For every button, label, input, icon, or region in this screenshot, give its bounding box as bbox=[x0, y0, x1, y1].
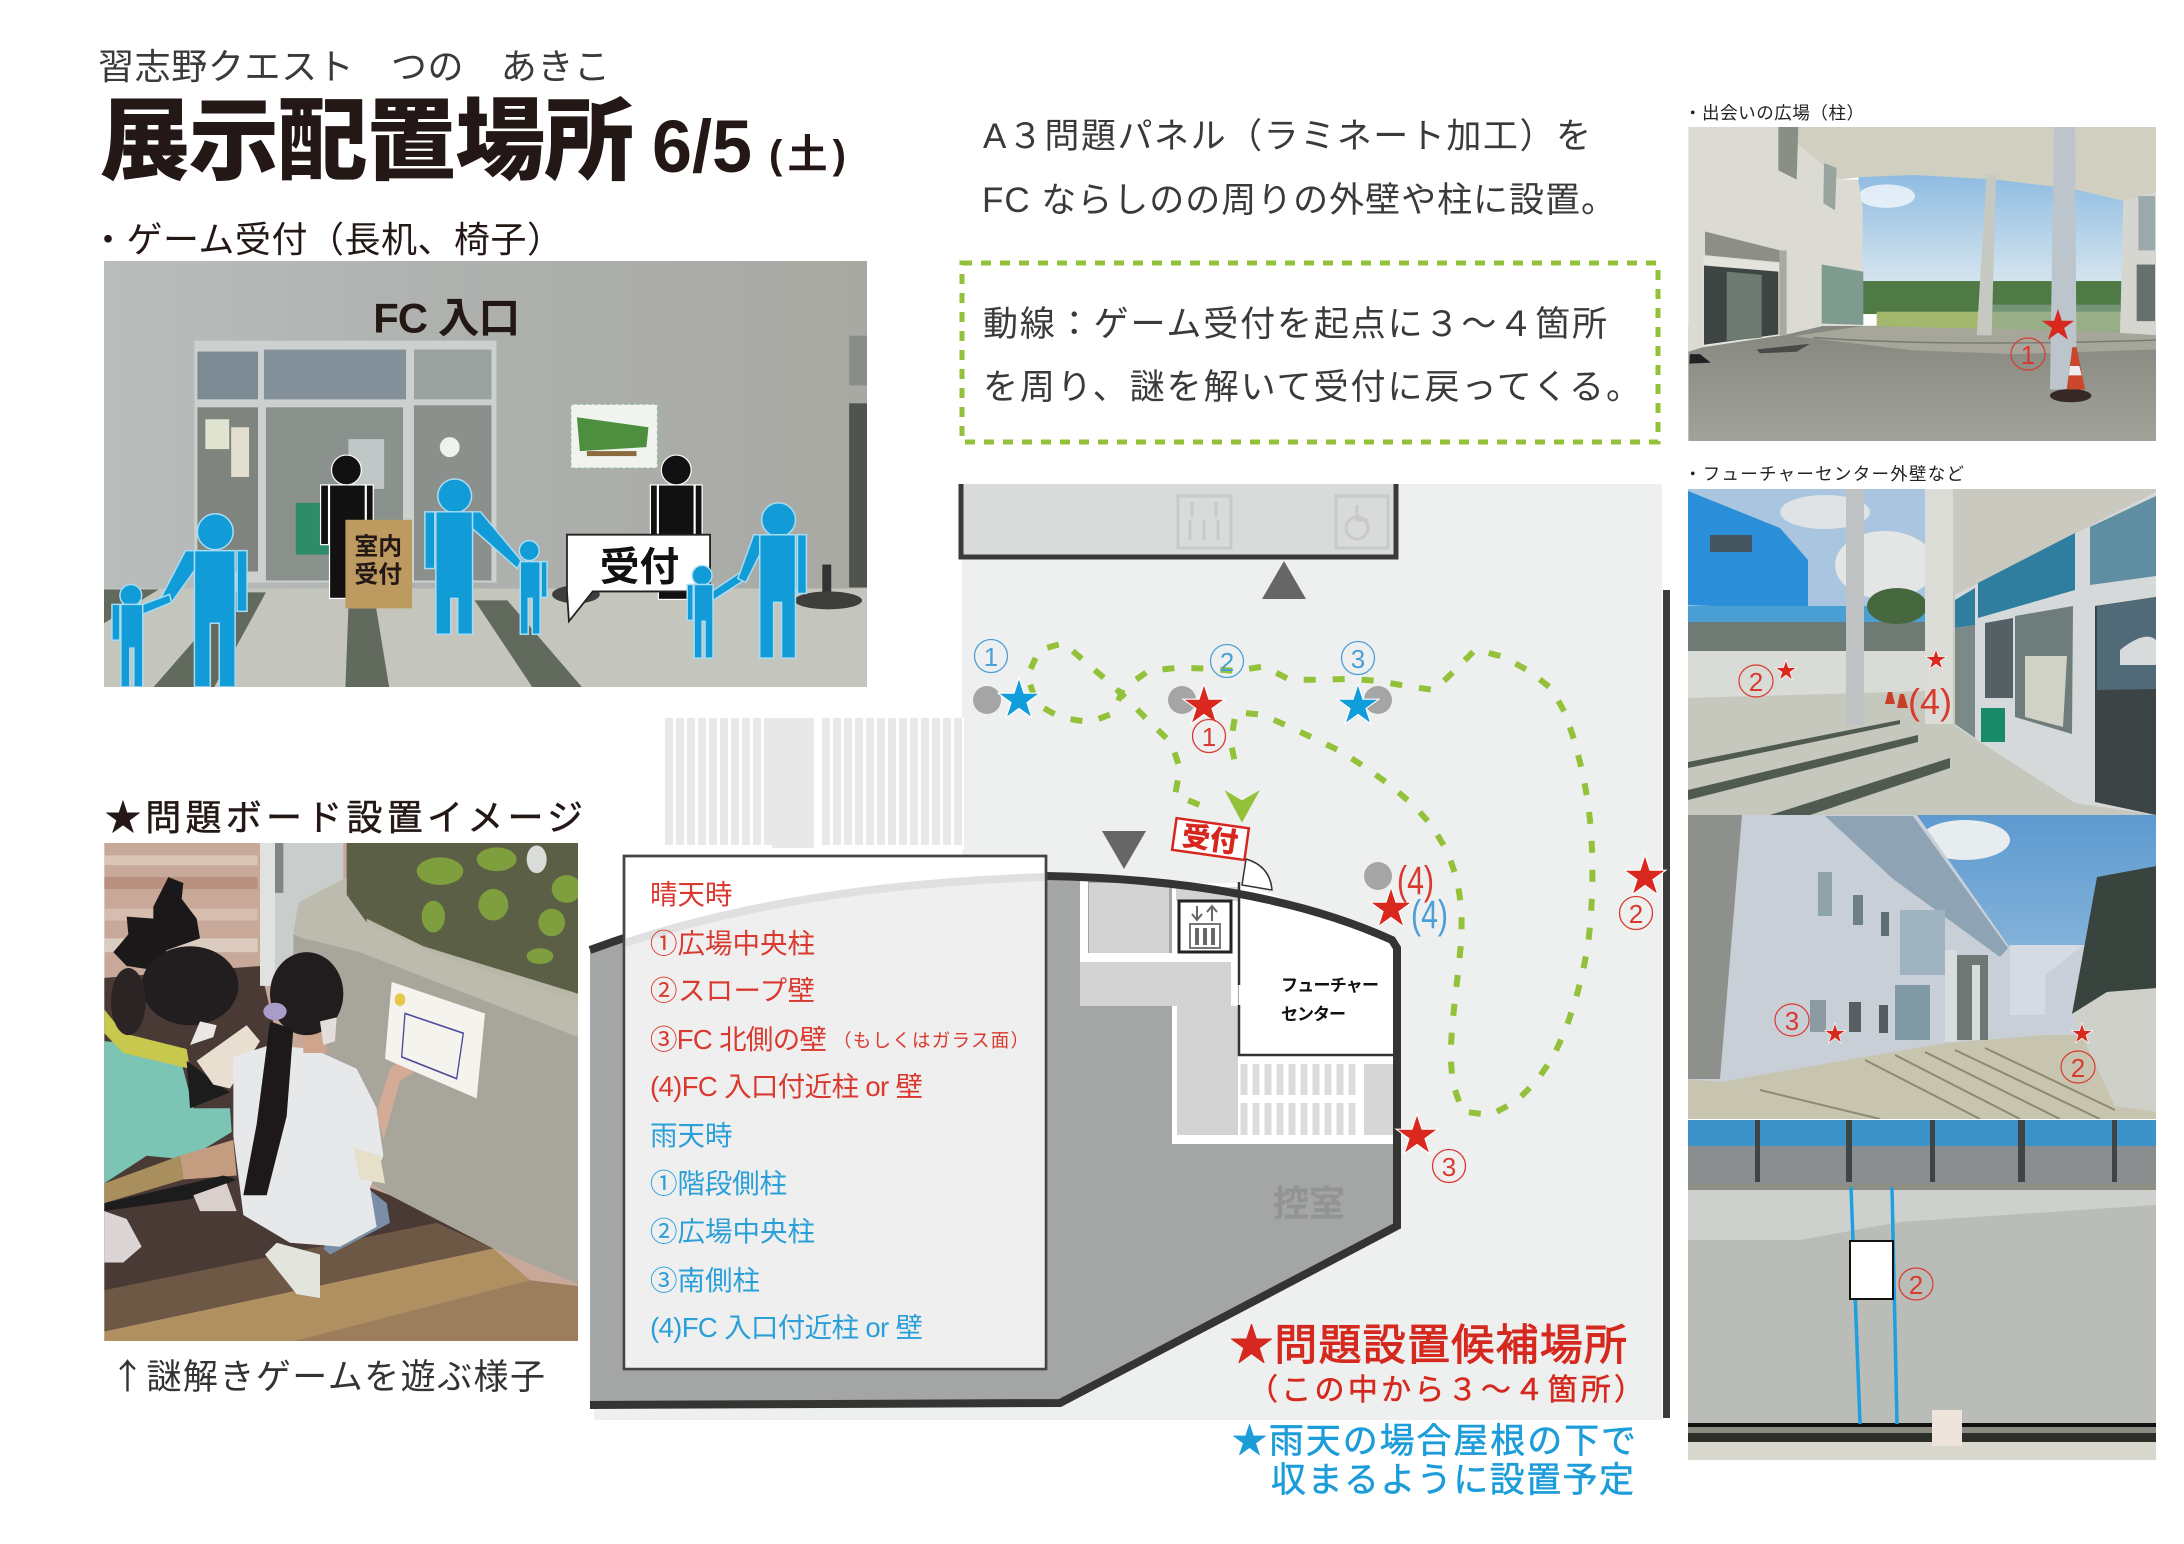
staff figure left bbox=[321, 455, 373, 598]
red stars bbox=[1776, 649, 1946, 680]
sample board bbox=[1932, 1410, 1962, 1446]
caption: meeting plaza pillar: ・出会いの広場（柱） bbox=[1684, 103, 1864, 123]
map: Future Center room: センター bbox=[1281, 1005, 1346, 1024]
green sign bbox=[1981, 708, 2005, 742]
legend: rainy day list: ②広場中央柱 bbox=[650, 1216, 815, 1247]
title: 展示配置場所 bbox=[100, 92, 634, 192]
map: red position numbers: 1 bbox=[1202, 722, 1216, 752]
legend: rainy day list: 雨天時 bbox=[650, 1120, 732, 1151]
text: A3 panel placement bbox=[982, 117, 1616, 220]
map: stairs bbox=[664, 718, 964, 850]
legend: sunny day list: (4)FC 入口付近柱 or 壁 bbox=[650, 1071, 923, 1102]
speech bubble: reception bbox=[567, 535, 710, 621]
photo panel: Future Center exterior bbox=[1688, 489, 2156, 815]
map: blue position numbers: (4) bbox=[1411, 893, 1448, 937]
staff figure right bbox=[650, 455, 702, 599]
note: candidate locations: ★問題設置候補場所 bbox=[1230, 1322, 1627, 1370]
position labels: 2 bbox=[1749, 667, 1763, 697]
map: pillars bbox=[973, 686, 1392, 890]
subtitle: team and author: 習志野クエスト つの あきこ bbox=[98, 46, 610, 87]
legend: sunny day list: ②スロープ壁 bbox=[650, 975, 815, 1006]
legend: sunny day list bbox=[650, 879, 1029, 1102]
legend: rainy day list: ③南側柱 bbox=[650, 1265, 760, 1296]
photo panel: children playing bbox=[104, 840, 582, 1345]
map: red position numbers: 2 bbox=[1629, 899, 1643, 929]
map: blue position numbers: 2 bbox=[1220, 647, 1234, 677]
legend: rainy day list bbox=[650, 1120, 923, 1343]
title date: (土) bbox=[769, 133, 846, 177]
position label bbox=[1899, 1268, 1933, 1300]
photo panel: south side of building bbox=[1688, 815, 2157, 1119]
sign: indoor reception bbox=[345, 520, 412, 608]
title date bbox=[652, 105, 846, 188]
map: blue position numbers: 1 bbox=[984, 642, 998, 672]
child in teal jacket bbox=[104, 946, 260, 1262]
map: blue stars bbox=[998, 678, 1379, 724]
legend: sunny day list: ①広場中央柱 bbox=[650, 928, 815, 959]
legend: rainy day list: ①階段側柱 bbox=[650, 1168, 787, 1199]
note: rainy day placement bbox=[1232, 1422, 1636, 1500]
legend: sunny day list: ③FC 北側の壁 bbox=[650, 1024, 827, 1055]
heading: board image: ★問題ボード設置イメージ bbox=[105, 797, 583, 838]
map: main building bbox=[590, 876, 1397, 1405]
photo panel: meeting plaza bbox=[1688, 127, 2158, 444]
blue tape lines bbox=[1851, 1187, 1897, 1424]
note: candidate locations: （この中から３～４箇所） bbox=[1248, 1374, 1644, 1407]
position 1: 1 bbox=[2021, 340, 2035, 370]
note: rainy day placement: ★雨天の場合屋根の下で bbox=[1232, 1422, 1636, 1461]
legend: sunny day list: （もしくはガラス面） bbox=[833, 1030, 1029, 1051]
position 1 bbox=[2011, 338, 2045, 370]
photo panel: game reception at FC entrance bbox=[104, 261, 867, 688]
legend: rainy day list: (4)FC 入口付近柱 or 壁 bbox=[650, 1312, 923, 1343]
text: A3 panel placement: FC ならしのの周りの外壁や柱に設置。 bbox=[982, 181, 1616, 220]
floor map bbox=[590, 484, 1670, 1420]
puzzle board bbox=[385, 982, 485, 1098]
map: red position numbers: (4) bbox=[1397, 859, 1434, 903]
caption: playing the game: ↑謎解きゲームを遊ぶ様子 bbox=[110, 1349, 545, 1400]
blue visitor figures bbox=[112, 479, 806, 687]
title date: 6/5 bbox=[652, 105, 752, 188]
map: lower stairs bbox=[1238, 1058, 1393, 1144]
map: right wall bbox=[1663, 590, 1670, 1418]
map: arrow down to entrance bbox=[1102, 831, 1146, 869]
sign: indoor reception: 室内 bbox=[354, 534, 402, 561]
dog bbox=[113, 877, 200, 970]
map: elevator icon bbox=[1179, 901, 1231, 952]
red star bbox=[2042, 309, 2074, 340]
map: upper building block bbox=[961, 484, 1396, 557]
position labels: 2 bbox=[2071, 1053, 2085, 1083]
position labels: 3 bbox=[1785, 1006, 1799, 1036]
map: red stars bbox=[1183, 684, 1666, 1154]
legend panel: sunny and rainy positions bbox=[624, 856, 1046, 1369]
note: candidate locations bbox=[1230, 1322, 1644, 1407]
map: red position numbers bbox=[1192, 720, 1652, 1182]
map: door bbox=[1242, 859, 1272, 890]
white board position bbox=[1850, 1241, 1893, 1299]
photo panel: slope wall bbox=[1688, 1120, 2156, 1460]
text: FC entrance: FC 入口 bbox=[373, 295, 520, 342]
map: Future Center room: フューチャー bbox=[1281, 976, 1379, 995]
heading: reception: ・ゲーム受付（長机、椅子） bbox=[90, 219, 563, 260]
map: arrow up to entrance bbox=[1262, 561, 1306, 599]
position labels bbox=[1739, 665, 1952, 722]
position labels: (4) bbox=[1908, 681, 1952, 722]
dashed box: visitor flow bbox=[962, 263, 1658, 442]
dashed box: visitor flow: 動線：ゲーム受付を起点に３～４箇所 bbox=[983, 305, 1607, 344]
map: reception tag: 受付 bbox=[1180, 820, 1240, 859]
traffic cone bbox=[2067, 347, 2085, 390]
legend: sunny day list: 晴天時 bbox=[650, 879, 732, 910]
position labels bbox=[1775, 1004, 2095, 1083]
speech bubble: reception: 受付 bbox=[600, 545, 679, 589]
position label: 2 bbox=[1909, 1270, 1923, 1300]
map: green dashed visitor route bbox=[1027, 643, 1592, 1115]
logo sign bbox=[571, 404, 657, 468]
map: Future Center room bbox=[1239, 882, 1393, 1055]
text: A3 panel placement: A３問題パネル（ラミネート加工）を bbox=[983, 117, 1591, 156]
map: blue position numbers bbox=[974, 640, 1448, 937]
child in white shirt bbox=[233, 952, 413, 1298]
dashed box: visitor flow: を周り、謎を解いて受付に戻ってくる。 bbox=[983, 368, 1641, 407]
ground lines bbox=[1760, 1048, 2115, 1119]
red stars bbox=[1825, 1023, 2092, 1043]
map: blue position numbers: 3 bbox=[1351, 644, 1365, 674]
red cones bbox=[1885, 692, 1908, 708]
map: waiting room label: 控室 bbox=[1273, 1183, 1345, 1224]
map: red position numbers: 3 bbox=[1442, 1152, 1456, 1182]
sign: indoor reception: 受付 bbox=[354, 561, 402, 588]
caption: Future Center outer wall: ・フューチャーセンター外壁など bbox=[1684, 464, 1964, 484]
note: rainy day placement: 収まるように設置予定 bbox=[1271, 1461, 1634, 1500]
